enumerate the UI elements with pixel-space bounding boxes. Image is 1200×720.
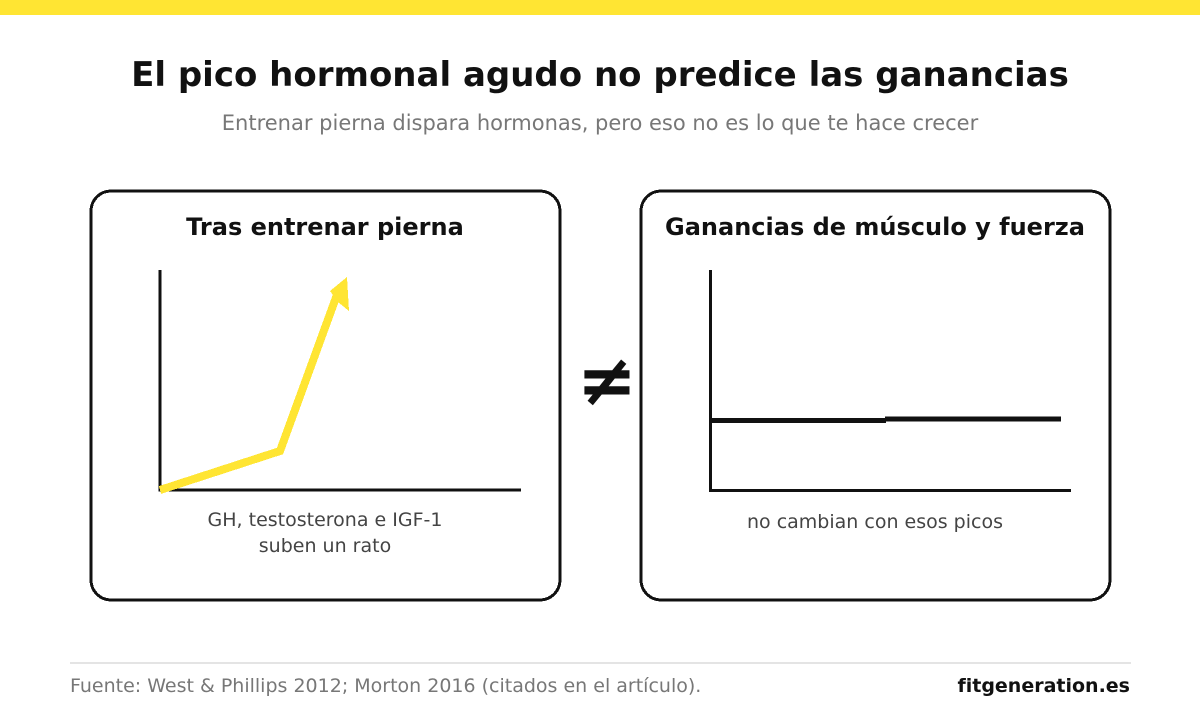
subtitle: Entrenar pierna dispara hormonas, pero eso no es lo que te hace crecer: [222, 111, 979, 135]
panel: tras entrenar pierna: [91, 191, 560, 600]
arrowhead: [330, 277, 349, 311]
panel heading: Ganancias de músculo y fuerza: [665, 213, 1085, 241]
chart caption: no cambian con esos picos: [747, 511, 1003, 533]
not-equal sign: ≠: [577, 338, 637, 422]
panel frame: [641, 191, 1110, 600]
panel heading: Tras entrenar pierna: [186, 213, 464, 241]
brand: fitgeneration.es: [957, 675, 1130, 697]
chart caption: GH, testosterona e IGF-1: [208, 509, 442, 531]
chart axes: [710, 270, 1071, 490]
top yellow bar: [0, 0, 1200, 15]
flat line: [710, 419, 1061, 420]
panel frame: [91, 191, 560, 600]
footer divider: [70, 662, 1131, 664]
chart caption: suben un rato: [259, 535, 391, 557]
chart: hormone spike: [160, 270, 521, 490]
panel: ganancias: [641, 191, 1110, 600]
title: El pico hormonal agudo no predice las ganancias: [131, 55, 1069, 95]
chart axes: [160, 270, 521, 490]
source note: Fuente: West & Phillips 2012; Morton 2016 (citados en el artículo).: [70, 675, 701, 697]
chart: flat gains: [710, 270, 1071, 490]
rising yellow line: [160, 292, 338, 490]
